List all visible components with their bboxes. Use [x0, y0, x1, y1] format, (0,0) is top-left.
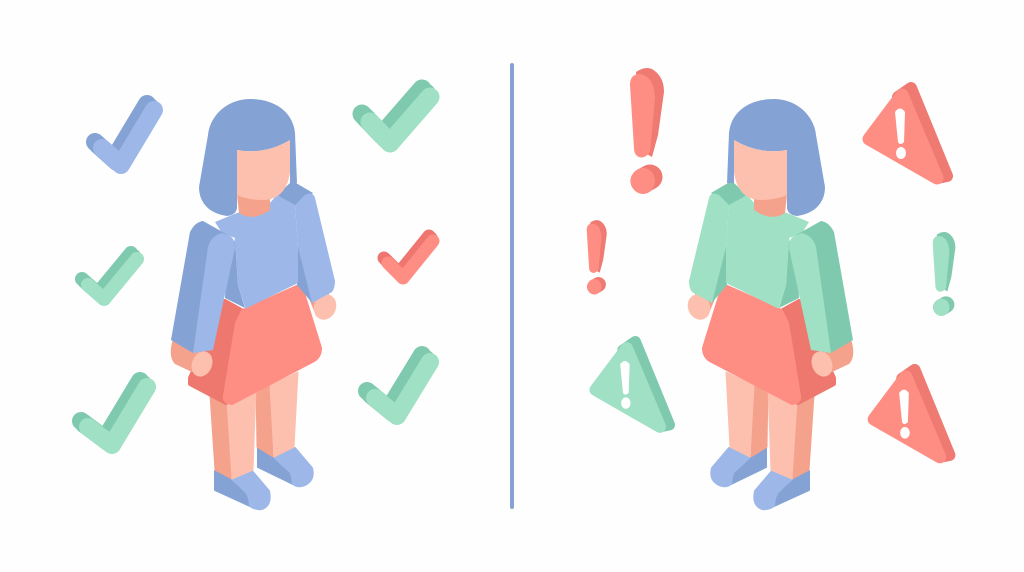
right shoulder shade [275, 183, 313, 207]
outer hand [808, 336, 853, 380]
right arm [295, 194, 335, 303]
torso shade, inner [711, 245, 727, 304]
back foot [258, 448, 313, 486]
short arm [689, 194, 729, 303]
back leg [726, 372, 768, 457]
shoulder shade [711, 183, 749, 207]
left hand [171, 336, 216, 380]
icon: mint exclamation [933, 232, 955, 316]
right hand [308, 286, 340, 323]
face [237, 140, 290, 200]
torso shade, right [297, 245, 313, 304]
face [734, 140, 787, 200]
hair [199, 99, 297, 216]
front foot [215, 471, 270, 509]
icon: mint check, upper right [362, 89, 430, 143]
front leg [768, 388, 814, 479]
neck [754, 195, 787, 217]
icon: red warning triangle, lower right [874, 370, 950, 457]
front leg [210, 388, 256, 479]
torso [726, 195, 809, 308]
long arm front face [789, 233, 831, 353]
icon: mint check, lower left [81, 381, 147, 445]
back foot [711, 448, 766, 486]
icon: mint check, lower right [367, 355, 430, 416]
icon: small red exclamation [587, 220, 607, 294]
skirt [704, 287, 834, 403]
torso shade, outer [779, 238, 799, 308]
inner hand [684, 286, 716, 323]
front foot [754, 471, 809, 509]
torso [215, 195, 298, 308]
icon: red check, middle right [384, 236, 433, 278]
torso shade, left [225, 238, 245, 308]
neck [237, 195, 270, 217]
left arm front face [193, 233, 235, 353]
icon: red warning triangle, upper right [869, 88, 947, 178]
central divider [510, 63, 514, 509]
icon: blue check, upper left [95, 104, 154, 165]
back leg [256, 372, 298, 457]
left arm back face [171, 221, 228, 353]
long arm back face [796, 221, 853, 353]
icon: large red exclamation [630, 68, 664, 194]
icon: mint warning triangle [596, 342, 669, 427]
figure: right, mint sweater [684, 99, 853, 509]
icon: mint check, middle left [82, 253, 137, 299]
figure: left, blue sweater [171, 99, 340, 509]
skirt [190, 287, 320, 403]
hair [727, 99, 825, 216]
